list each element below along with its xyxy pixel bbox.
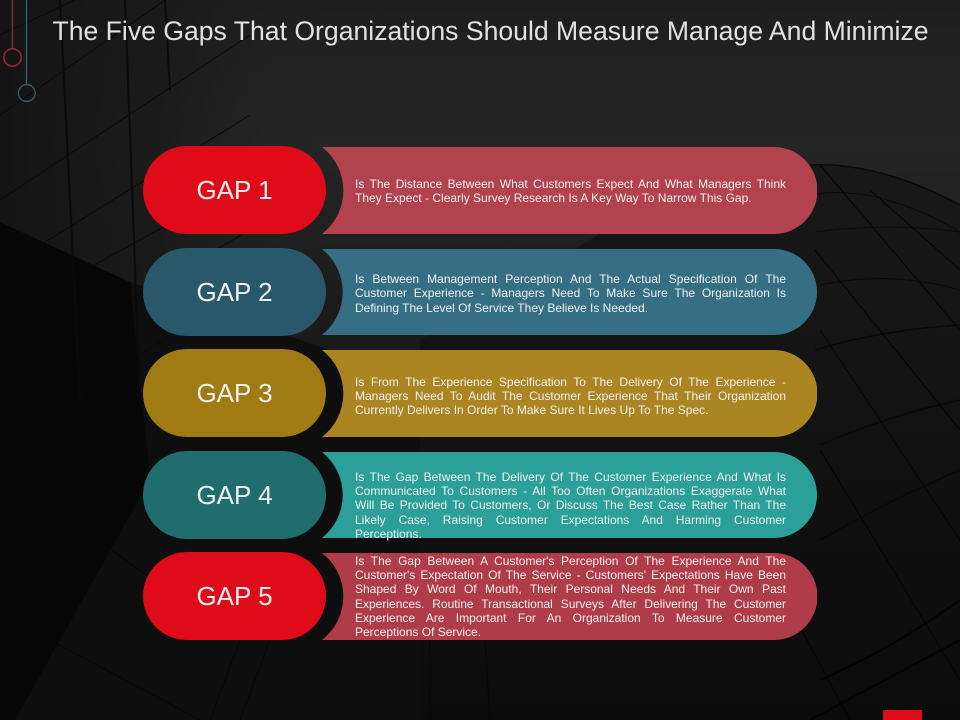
gap 5 label pill: GAP 5 (196, 581, 273, 611)
gap 5 description: Shaped By Word Of Mouth, Their Personal Needs And Their Own Past (355, 582, 786, 596)
gap 5 description: Experience Are Important For An Organization To Measure Customer (355, 611, 786, 625)
gap 4 description: Perceptions. (355, 527, 422, 541)
gap 3 description (355, 374, 786, 417)
gap 4 label pill (143, 451, 326, 539)
gap 3 label pill: GAP 3 (196, 378, 273, 408)
gap 1 label pill (143, 146, 326, 234)
gap 2 description: Is Between Management Perception And The Actual Specification Of The (355, 272, 786, 286)
panel: gap 1 (143, 146, 817, 234)
gap 3 description: Managers Need To Audit The Customer Experience That Their Organization (355, 389, 786, 403)
title: The Five Gaps That Organizations Should Measure Manage And Minimize (52, 16, 929, 46)
gap 5 description: Is The Gap Between A Customer's Perception Of The Experience And The (355, 554, 786, 568)
gap 1 label pill: GAP 1 (196, 175, 273, 205)
panel: gap 5 (143, 552, 817, 640)
panel: gap 4 (143, 451, 817, 541)
red corner tab (883, 710, 922, 720)
gap 4 description (355, 470, 786, 541)
panel: gap 2 (143, 248, 817, 336)
gap 5 description: Perceptions Of Service. (355, 625, 481, 639)
gap 5 description (355, 554, 786, 639)
panel: gap 3 (143, 349, 817, 437)
gap 4 label pill: GAP 4 (196, 480, 273, 510)
gap 3 description: Is From The Experience Specification To The Delivery Of The Experience - (355, 374, 786, 388)
gap 2 description (355, 272, 786, 315)
gap 4 description: Likely Case, Raising Customer Expectations And Harming Customer (355, 513, 786, 527)
gap 3 description: Currently Delivers In Order To Make Sure It Lives Up To The Spec. (355, 403, 708, 417)
gap 5 label pill (143, 552, 326, 640)
gap 2 description: Customer Experience - Managers Need To Make Sure The Organization Is (355, 286, 786, 300)
gap 4 description: Will Be Provided To Customers, Or Discuss The Best Case Rather Than The (355, 498, 786, 512)
gap 2 description: Defining The Level Of Service They Believe Is Needed. (355, 301, 648, 315)
gap 2 label pill (143, 248, 326, 336)
gap 3 label pill (143, 349, 326, 437)
gap 5 description: Customer's Expectation Of The Service - Customers' Expectations Have Been (355, 568, 786, 582)
gap 4 description: Is The Gap Between The Delivery Of The Customer Experience And What Is (355, 470, 786, 484)
gap 5 description: Experiences. Routine Transactional Surveys After Delivering The Customer (355, 597, 786, 611)
gap 2 label pill: GAP 2 (196, 277, 273, 307)
decoration: red pendant line and ring (3, 0, 22, 67)
gap 4 description: Communicated To Customers - All Too Often Organizations Exaggerate What (355, 484, 786, 498)
gap 1 description: Is The Distance Between What Customers Expect And What Managers Think (355, 177, 786, 191)
gap 1 description (355, 177, 786, 205)
decoration: blue pendant line and ring (18, 0, 36, 102)
gap 1 description: They Expect - Clearly Survey Research Is A Key Way To Narrow This Gap. (355, 191, 752, 205)
